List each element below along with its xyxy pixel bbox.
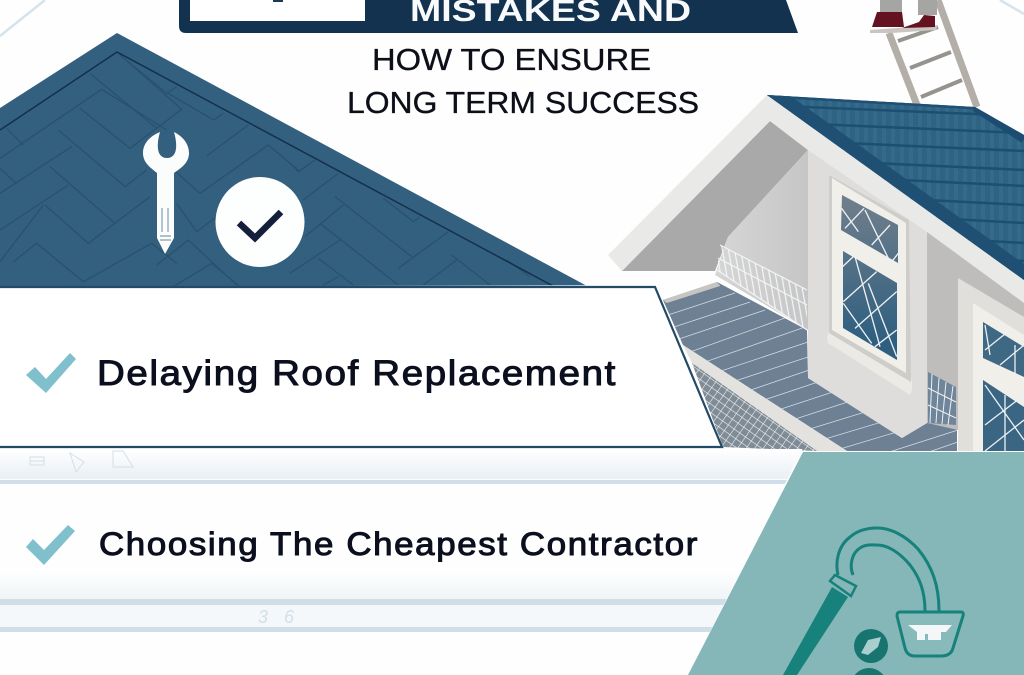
- item text: Choosing The Cheapest Contractor: [99, 526, 699, 562]
- window 2: [973, 303, 1024, 451]
- panel: choosing the cheapest contractor: [26, 525, 699, 565]
- gable trim: [608, 95, 1024, 303]
- side wall: [715, 150, 808, 330]
- porch floor: [663, 282, 957, 451]
- right wall: [958, 278, 1024, 451]
- teal panel: [688, 452, 1024, 675]
- soffit: [622, 121, 808, 271]
- window 1: [827, 175, 912, 395]
- icon: round badges: [851, 629, 888, 675]
- house illustration: [608, 95, 1024, 455]
- ladder and worker feet: [870, 0, 977, 107]
- worker legs: [880, 0, 902, 12]
- trim band: [683, 345, 847, 451]
- title banner: [179, 0, 798, 33]
- shadow wall: [927, 232, 1024, 430]
- left roof panel: [0, 33, 587, 287]
- mesh: [692, 363, 817, 451]
- small outlined shapes: [30, 451, 133, 472]
- subtitle: LONG TERM SUCCESS: [347, 85, 699, 120]
- icon: check circle: [216, 177, 304, 267]
- subtitle: [347, 42, 699, 120]
- icon: check mark: [26, 353, 76, 393]
- icon: check mark: [26, 525, 75, 565]
- lower striped background: 6: [284, 607, 295, 627]
- fence railing: [717, 245, 807, 330]
- icon: wrench: [143, 132, 189, 254]
- faint numerals: 3: [258, 607, 268, 627]
- front wall: [808, 150, 927, 438]
- lower striped background: [0, 449, 810, 632]
- item text: Delaying Roof Replacement: [97, 354, 617, 393]
- white title box: [190, 0, 365, 21]
- icon: hose and basket: [783, 528, 963, 675]
- worker shoes: [872, 12, 904, 27]
- panel: delaying roof replacement: [0, 285, 722, 447]
- subtitle: HOW TO ENSURE: [372, 42, 651, 77]
- blue shingle roof: [767, 95, 1024, 285]
- small lattice: [928, 372, 956, 425]
